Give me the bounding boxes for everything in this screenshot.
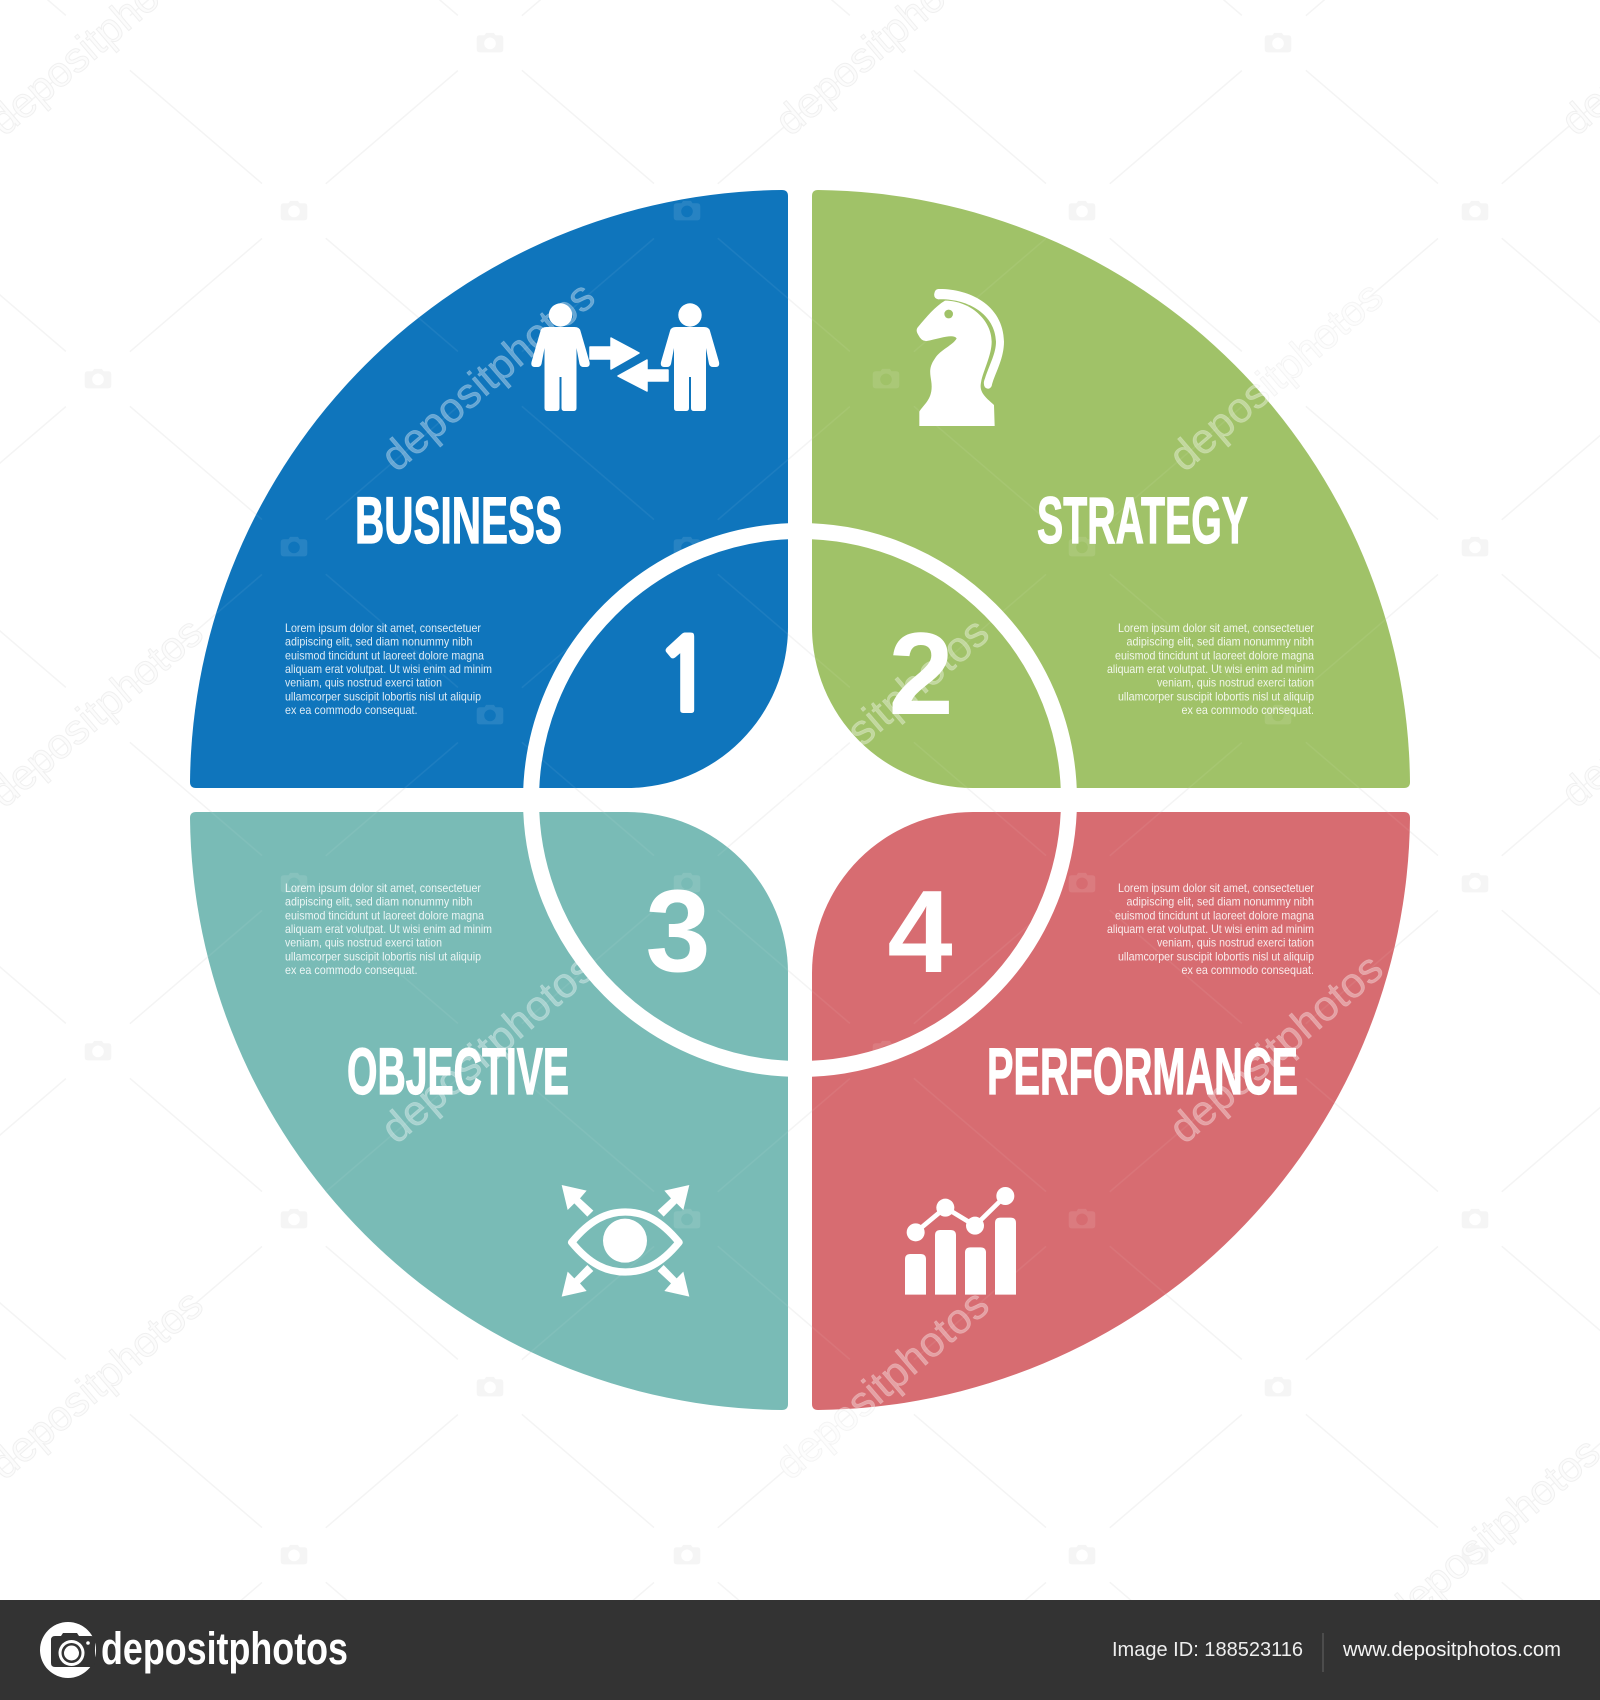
text block: performance: veniam, quis nostrud exerci tation bbox=[1157, 936, 1314, 950]
text block: strategy: aliquam erat volutpat. Ut wisi enim ad minim bbox=[1107, 662, 1314, 676]
heading: performance: PERFORMANCE bbox=[987, 1034, 1298, 1108]
icon: bar chart with trend line bbox=[905, 1187, 1016, 1295]
text block: objective: ullamcorper suscipit lobortis nisl ut aliquip bbox=[285, 949, 481, 963]
icon: eye with four arrows bbox=[562, 1185, 689, 1297]
watermarks over quadrants bbox=[372, 272, 1391, 1488]
text block: strategy: Lorem ipsum dolor sit amet, consectetuer bbox=[1118, 621, 1314, 635]
text block: strategy: veniam, quis nostrud exerci tation bbox=[1157, 676, 1314, 690]
text block: objective bbox=[285, 881, 492, 977]
text block: strategy bbox=[1107, 621, 1314, 717]
heading: strategy: STRATEGY bbox=[1037, 483, 1248, 557]
text block: objective: adipiscing elit, sed diam nonummy nibh bbox=[285, 895, 472, 909]
watermarks over quadrants: depositphotos bbox=[372, 272, 603, 480]
text block: performance: ullamcorper suscipit lobortis nisl ut aliquip bbox=[1118, 949, 1314, 963]
heading: objective: OBJECTIVE bbox=[347, 1034, 569, 1108]
background watermarks on white: depositphotos bbox=[766, 1280, 997, 1488]
number 2: 2 bbox=[888, 608, 954, 739]
icon: chess knight bbox=[917, 289, 1004, 426]
number 1: 1 bbox=[654, 626, 716, 727]
background watermarks on white: depositphotos bbox=[1160, 272, 1391, 480]
text block: strategy: ullamcorper suscipit lobortis nisl ut aliquip bbox=[1118, 689, 1314, 703]
text block: business: ex ea commodo consequat. bbox=[285, 703, 418, 717]
text block: business bbox=[285, 621, 492, 717]
watermarks over quadrants: depositphotos bbox=[1160, 272, 1391, 480]
watermarks over quadrants: depositphotos bbox=[766, 608, 997, 816]
website url: www.depositphotos.com bbox=[1342, 1639, 1561, 1661]
text block: performance: ex ea commodo consequat. bbox=[1182, 963, 1314, 977]
icon: camera logo bbox=[40, 1622, 96, 1678]
text block: performance: adipiscing elit, sed diam nonummy nibh bbox=[1126, 895, 1314, 909]
text block: business: veniam, quis nostrud exerci tation bbox=[285, 676, 442, 690]
text block: business: euismod tincidunt ut laoreet dolore magna bbox=[285, 648, 484, 662]
logo wordmark: depositphotos bbox=[101, 1623, 348, 1674]
text block: business: Lorem ipsum dolor sit amet, consectetuer bbox=[285, 621, 481, 635]
text block: strategy: euismod tincidunt ut laoreet dolore magna bbox=[1115, 648, 1314, 662]
text block: business: ullamcorper suscipit lobortis nisl ut aliquip bbox=[285, 689, 481, 703]
watermarks over quadrants: depositphotos bbox=[1160, 944, 1391, 1152]
text block: strategy: adipiscing elit, sed diam nonummy nibh bbox=[1126, 635, 1314, 649]
icon: two people exchanging arrows bbox=[531, 303, 719, 411]
text block: objective: ex ea commodo consequat. bbox=[285, 963, 418, 977]
image id: Image ID: 188523116 bbox=[1112, 1639, 1303, 1661]
watermarks over quadrants: depositphotos bbox=[372, 944, 603, 1152]
text block: performance: aliquam erat volutpat. Ut wisi enim ad minim bbox=[1107, 922, 1314, 936]
footer banner bbox=[0, 1600, 1600, 1700]
text block: performance bbox=[1107, 881, 1314, 977]
panel: strategy quadrant bbox=[812, 190, 1410, 788]
text block: business: aliquam erat volutpat. Ut wisi enim ad minim bbox=[285, 662, 492, 676]
text block: objective: euismod tincidunt ut laoreet dolore magna bbox=[285, 908, 484, 922]
background watermarks on white: depositphotos bbox=[1377, 1428, 1600, 1636]
text block: performance: euismod tincidunt ut laoreet dolore magna bbox=[1115, 908, 1314, 922]
text block: objective: Lorem ipsum dolor sit amet, consectetuer bbox=[285, 881, 481, 895]
panel: business quadrant bbox=[190, 190, 788, 788]
watermarks over quadrants: depositphotos bbox=[766, 1280, 997, 1488]
heading: business: BUSINESS bbox=[355, 483, 562, 557]
number 4: 4 bbox=[887, 866, 953, 997]
text block: objective: aliquam erat volutpat. Ut wisi enim ad minim bbox=[285, 922, 492, 936]
text block: business: adipiscing elit, sed diam nonummy nibh bbox=[285, 635, 472, 649]
text block: objective: veniam, quis nostrud exerci tation bbox=[285, 936, 442, 950]
text block: strategy: ex ea commodo consequat. bbox=[1182, 703, 1314, 717]
panel: performance quadrant bbox=[812, 812, 1410, 1410]
lattice over coloured quadrants bbox=[190, 190, 1410, 1410]
panel: objective quadrant bbox=[190, 812, 788, 1410]
divider bbox=[1322, 1633, 1324, 1672]
text block: performance: Lorem ipsum dolor sit amet, consectetuer bbox=[1118, 881, 1314, 895]
number 3: 3 bbox=[645, 865, 711, 996]
centre ring bbox=[531, 531, 1069, 1069]
